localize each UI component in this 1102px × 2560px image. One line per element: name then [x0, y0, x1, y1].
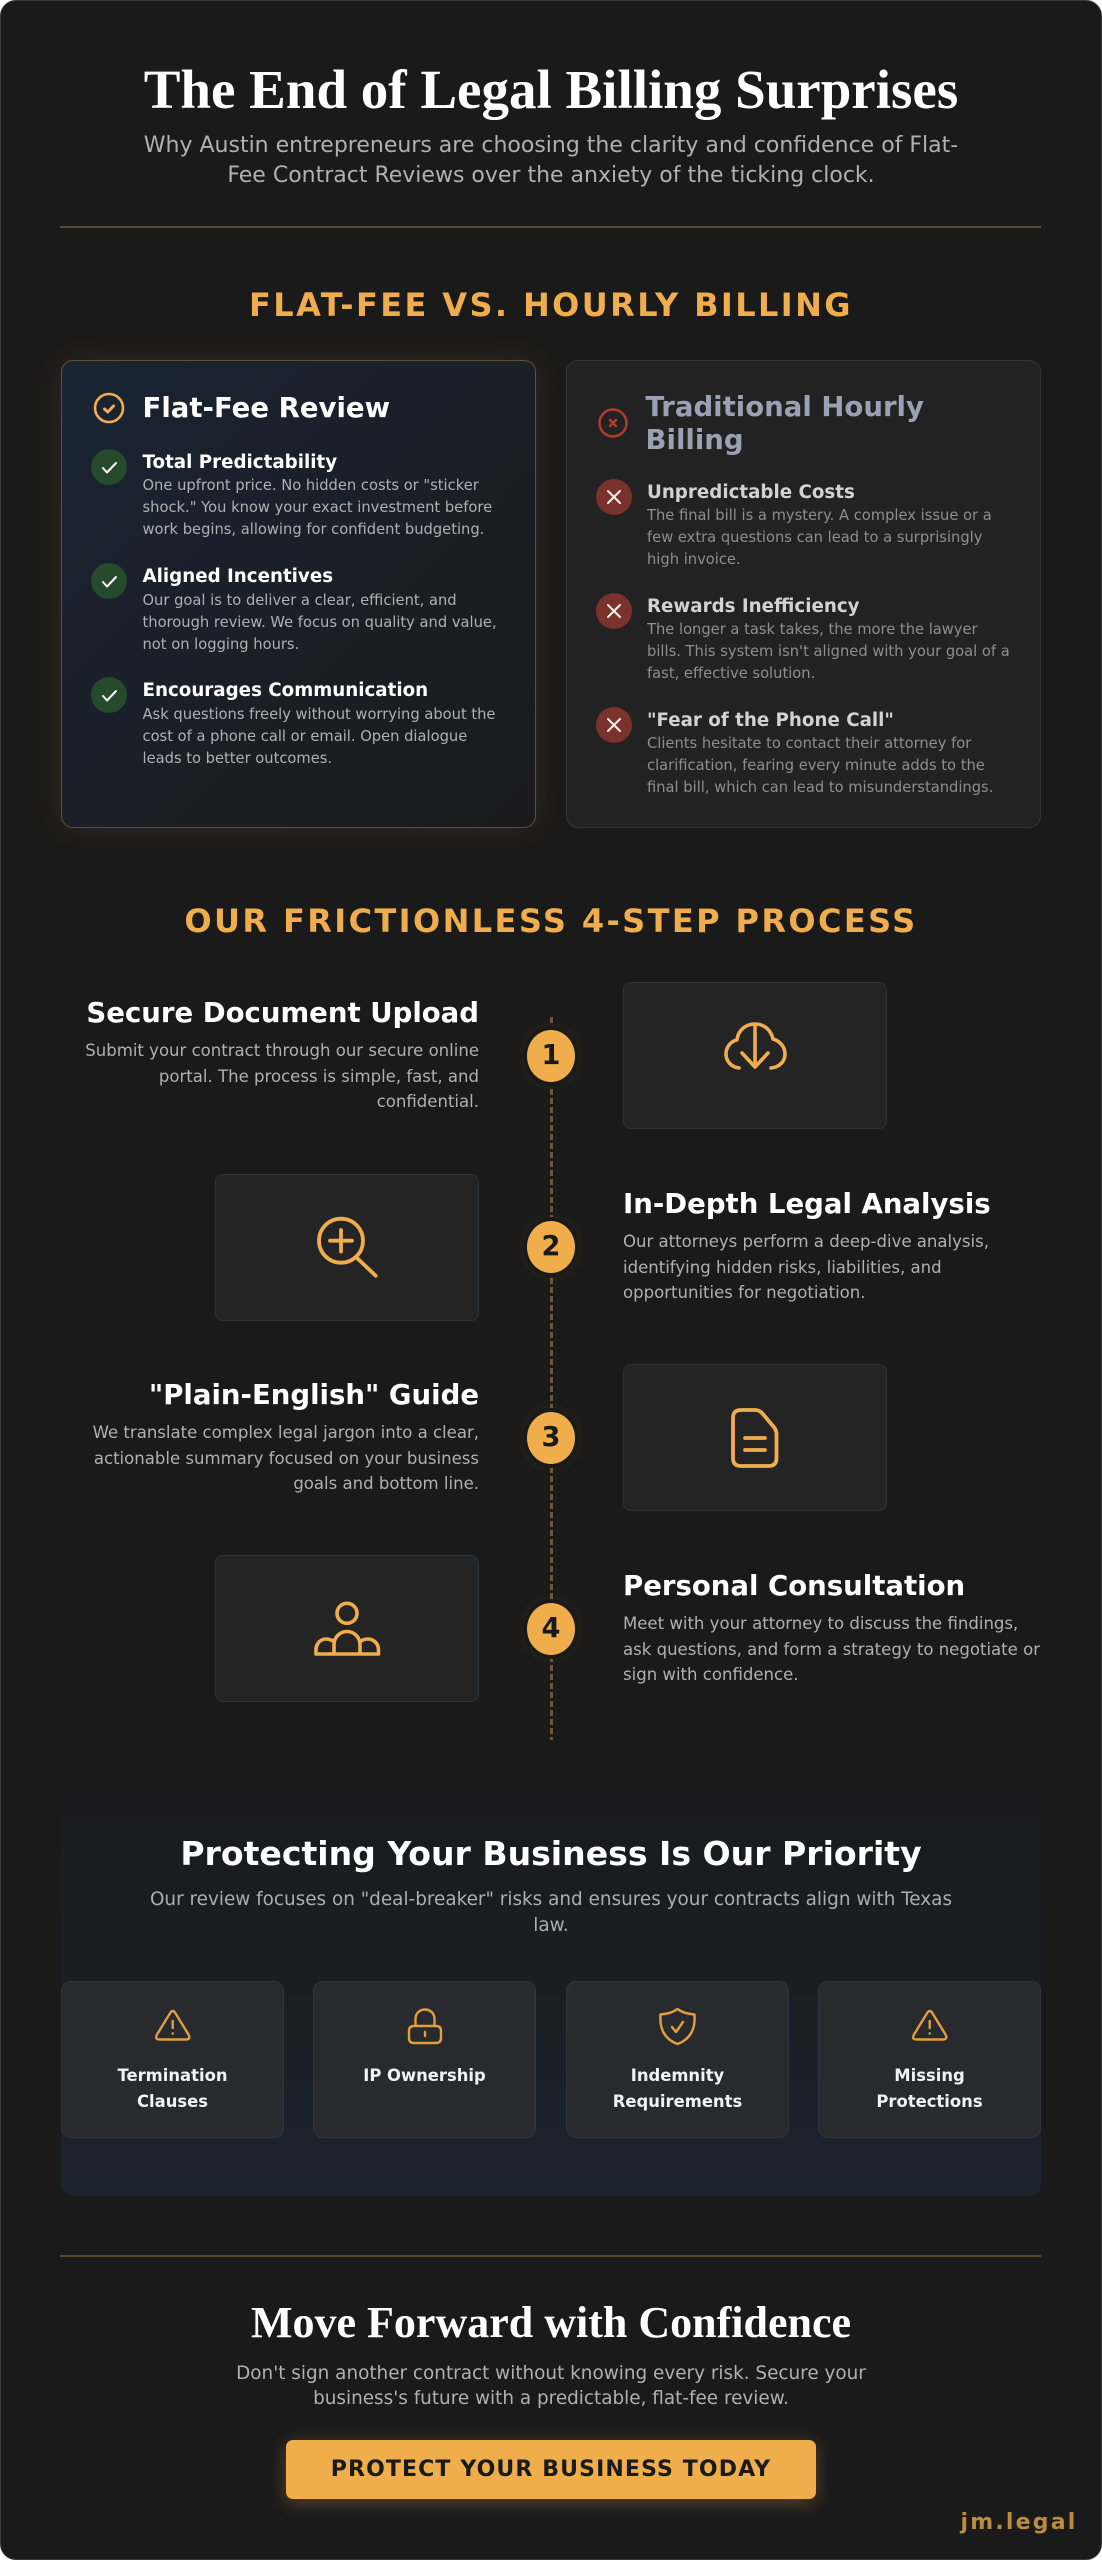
heading: traditional hourly billing: Billing: [646, 424, 744, 456]
icon: shield check: [659, 2008, 696, 2046]
drawback text: phone call: final bill, which can lead to misunderstandings.: [647, 778, 993, 796]
icon: flat-fee check circle: [94, 392, 124, 424]
drawback text: unpredictable: few extra questions can lead to a surprisingly: [647, 528, 982, 546]
benefit text: incentives: thorough review. We focus on quality and value,: [142, 614, 497, 630]
step 4 number: [527, 1603, 575, 1655]
protection description: Our review focuses on "deal-breaker" risks and ensures your contracts align with Texas: [150, 1888, 952, 1910]
drawback text: phone call: clarification, fearing every minute adds to the: [647, 756, 985, 774]
icon: hourly x circle: [598, 408, 628, 438]
heading: flat-fee review: Flat-Fee Review: [142, 392, 390, 424]
subtitle: Fee Contract Reviews over the anxiety of the ticking clock.: [227, 163, 875, 188]
step 1 text: Submit your contract through our secure online: [85, 1041, 479, 1060]
benefit icon: incentives: [91, 563, 127, 599]
drawback text: unpredictable: high invoice.: [647, 550, 741, 568]
subtitle: [144, 133, 958, 188]
panel: flat-fee review: [61, 360, 536, 828]
step 4 image box: [215, 1555, 479, 1702]
call to action button: [286, 2440, 816, 2499]
risk card: missing protections: [818, 1981, 1041, 2138]
benefit text: predictability: shock." You know your exact investment before: [142, 499, 492, 516]
heading: traditional hourly billing: [646, 390, 924, 456]
step 4 text: sign with confidence.: [623, 1665, 799, 1684]
panel: traditional hourly billing: [566, 360, 1041, 828]
benefit text: communication: cost of a phone call or email. Open dialogue: [142, 728, 467, 744]
drawback icon: inefficiency: [596, 593, 632, 629]
icon: magnifier plus: [317, 1216, 378, 1278]
benefit text: predictability: work begins, allowing for confident budgeting.: [142, 521, 484, 538]
step 1 text: confidential.: [377, 1092, 479, 1111]
section heading: comparison: FLAT-FEE VS. HOURLY BILLING: [249, 286, 853, 324]
step 2 number: [527, 1221, 575, 1273]
drawback title: inefficiency: Rewards Inefficiency: [647, 596, 860, 616]
timeline dashed line: [550, 1017, 553, 1740]
drawback text: unpredictable: [646, 506, 992, 568]
drawback text: inefficiency: The longer a task takes, the more the lawyer: [647, 620, 978, 638]
step 3 text: [93, 1423, 479, 1493]
protection description: law.: [533, 1914, 569, 1936]
step 2 text: identifying hidden risks, liabilities, and: [623, 1258, 942, 1277]
brand mark: jm.legal: [960, 2510, 1078, 2534]
closing text: Don't sign another contract without knowing every risk. Secure your: [236, 2362, 866, 2384]
step 1 image box: [623, 982, 887, 1129]
closing title: Move Forward with Confidence: [251, 2298, 851, 2346]
step 3 number: 3: [542, 1422, 560, 1453]
risk label: termination: Termination: [117, 2066, 228, 2085]
icon: warning triangle: [155, 2010, 190, 2041]
benefit icon: communication: [91, 677, 127, 713]
step 1 number: [527, 1030, 575, 1082]
step 4 number: 4: [542, 1613, 560, 1644]
step 2 text: opportunities for negotiation.: [623, 1283, 866, 1302]
step 4 text: [623, 1614, 1040, 1684]
step 4 text: ask questions, and form a strategy to negotiate or: [623, 1640, 1040, 1659]
drawback title: phone call: "Fear of the Phone Call": [647, 710, 894, 730]
heading: protecting your business: Protecting Your Business Is Our Priority: [180, 1834, 922, 1873]
subtitle: Why Austin entrepreneurs are choosing the clarity and confidence of Flat-: [144, 133, 958, 158]
closing text: business's future with a predictable, flat-fee review.: [313, 2388, 789, 2409]
risk card: indemnity: [566, 1981, 789, 2138]
drawback icon: unpredictable: [596, 479, 632, 515]
step 2 number: 2: [542, 1231, 560, 1262]
step 3 title: "Plain-English" Guide: [149, 1379, 479, 1411]
benefit text: predictability: [142, 477, 492, 538]
step 4 title: Personal Consultation: [623, 1570, 965, 1602]
step 3 text: We translate complex legal jargon into a clear,: [93, 1423, 479, 1442]
benefit title: communication: Encourages Communication: [142, 680, 428, 701]
step 4 text: Meet with your attorney to discuss the findings,: [623, 1614, 1018, 1633]
risk label: missing protections: [876, 2066, 983, 2111]
benefit text: predictability: One upfront price. No hidden costs or "sticker: [142, 477, 479, 494]
drawback text: inefficiency: fast, effective solution.: [647, 664, 815, 682]
step 2 text: Our attorneys perform a deep-dive analysis,: [623, 1232, 989, 1251]
drawback text: phone call: [647, 734, 993, 796]
risk card: IP ownership: [313, 1981, 536, 2138]
risk label: missing protections: Protections: [876, 2092, 983, 2111]
benefit title: predictability: Total Predictability: [142, 452, 337, 473]
call to action button: PROTECT YOUR BUSINESS TODAY: [331, 2457, 771, 2482]
risk label: indemnity: Indemnity: [631, 2066, 724, 2085]
step 3 image box: [623, 1364, 887, 1511]
protection description: [150, 1888, 952, 1936]
section heading: process: OUR FRICTIONLESS 4-STEP PROCESS: [184, 902, 918, 940]
step 3 text: goals and bottom line.: [293, 1474, 479, 1493]
step 3 text: actionable summary focused on your business: [94, 1449, 479, 1468]
closing text: [236, 2362, 866, 2409]
drawback title: unpredictable: Unpredictable Costs: [647, 482, 855, 502]
risk label: termination: Clauses: [137, 2092, 208, 2111]
step 2 text: [623, 1232, 989, 1302]
risk label: indemnity: [613, 2066, 742, 2111]
benefit text: communication: leads to better outcomes.: [142, 750, 332, 766]
step 1 number: 1: [542, 1040, 560, 1071]
drawback text: unpredictable: The final bill is a mystery. A complex issue or a: [647, 506, 992, 524]
panel: protecting your business: [61, 1788, 1041, 2196]
benefit icon: predictability: [91, 449, 127, 485]
drawback icon: phone call: [596, 707, 632, 743]
step 1 title: Secure Document Upload: [86, 997, 479, 1029]
drawback text: inefficiency: bills. This system isn't aligned with your goal of a: [647, 642, 1010, 660]
drawback text: inefficiency: [646, 620, 1010, 682]
risk label: indemnity: Requirements: [613, 2092, 742, 2111]
benefit text: incentives: Our goal is to deliver a clear, efficient, and: [142, 592, 457, 608]
risk label: missing protections: Missing: [894, 2066, 965, 2085]
step 1 text: [85, 1041, 479, 1111]
icon: warning triangle: [912, 2010, 948, 2041]
risk card: termination: [61, 1981, 284, 2138]
title: The End of Legal Billing Surprises: [144, 58, 958, 120]
step 2 image box: [215, 1174, 479, 1320]
step 3 number: [527, 1412, 575, 1464]
step 2 title: In-Depth Legal Analysis: [623, 1188, 991, 1220]
benefit text: communication: Ask questions freely without worrying about the: [142, 706, 495, 722]
icon: document: [731, 1408, 778, 1468]
benefit title: incentives: Aligned Incentives: [142, 566, 333, 587]
step 1 text: portal. The process is simple, fast, and: [159, 1067, 479, 1086]
icon: people group: [314, 1602, 380, 1656]
icon: lock: [408, 2008, 442, 2044]
benefit text: incentives: not on logging hours.: [142, 636, 299, 652]
drawback text: phone call: Clients hesitate to contact their attorney for: [647, 734, 971, 752]
risk label: termination: [117, 2066, 228, 2111]
heading: traditional hourly billing: Traditional Hourly: [646, 390, 924, 422]
risk label: IP ownership: IP Ownership: [363, 2066, 486, 2085]
icon: cloud download: [724, 1022, 787, 1070]
benefit text: incentives: [142, 592, 497, 652]
benefit text: communication: [142, 706, 495, 766]
